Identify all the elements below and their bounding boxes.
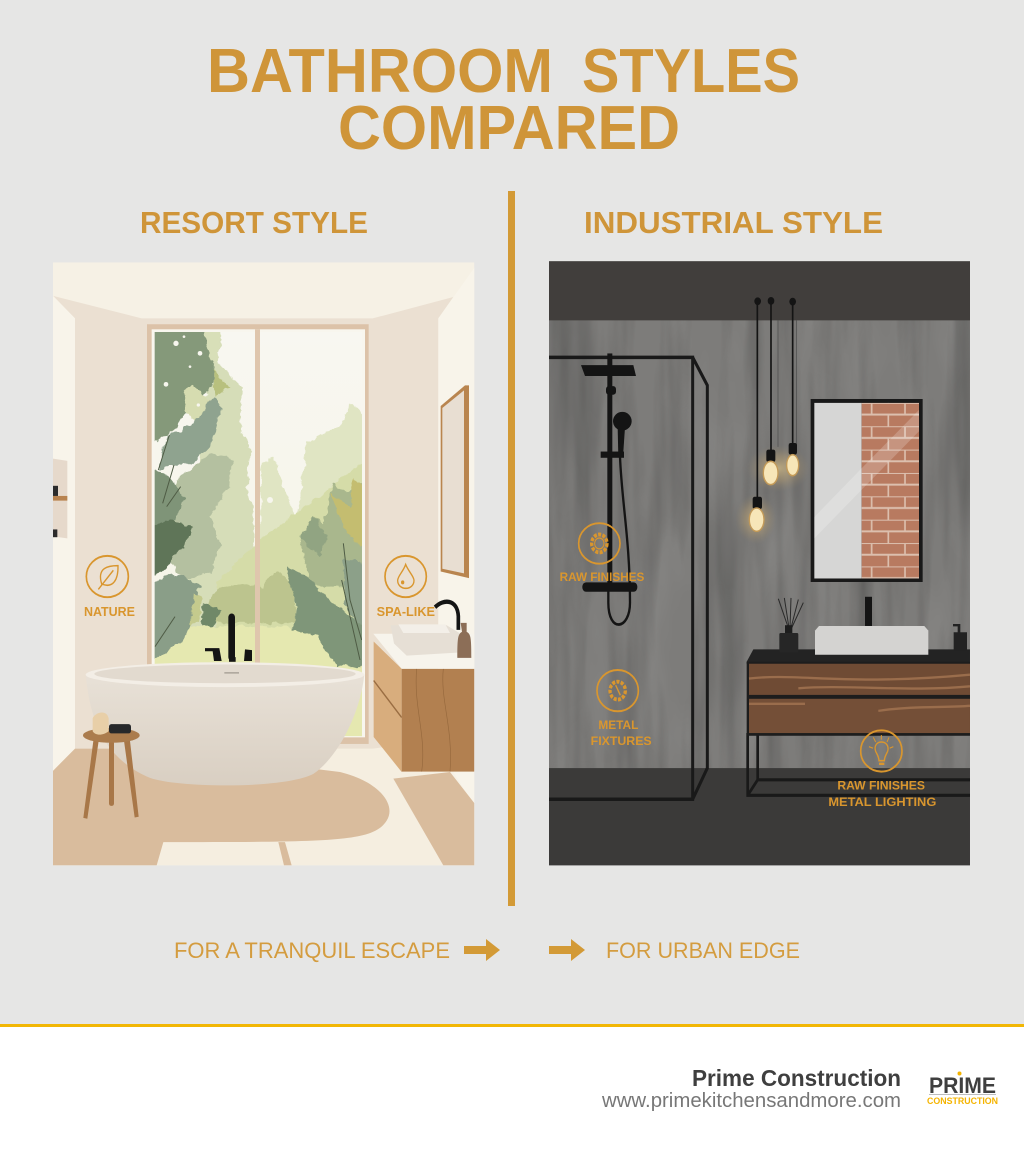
icon: water drop (385, 556, 426, 597)
soap bottle (457, 623, 471, 658)
logo: prime construction: CONSTRUCTION (927, 1096, 998, 1107)
label: metal fixtures: METAL (598, 719, 638, 732)
window (147, 324, 369, 744)
concrete ceiling (549, 261, 970, 320)
title: COMPARED (338, 94, 680, 163)
icon: metal fixture gear (597, 670, 638, 711)
caption: for urban edge: FOR URBAN EDGE (606, 938, 800, 963)
label: raw finishes metal lighting: METAL LIGHTING (828, 797, 937, 809)
reed diffuser (778, 598, 803, 652)
icon: light bulb (861, 730, 902, 772)
vanity cabinet (373, 634, 474, 772)
shower enclosure frame (549, 357, 707, 799)
footer: company name and website: www.primekitchensandmore.com (601, 1090, 901, 1112)
vessel sink and tap (815, 597, 928, 655)
vessel sink and faucet (391, 602, 459, 656)
vanity (747, 649, 970, 795)
icon: gear (579, 523, 620, 564)
wall mirror (441, 385, 469, 578)
label: raw finishes metal lighting: RAW FINISHES (837, 780, 926, 793)
heading: industrial style: INDUSTRIAL STYLE (584, 205, 883, 240)
arrow: right (549, 939, 585, 961)
concrete floor (549, 768, 970, 865)
mirror with brick reflection (811, 399, 923, 582)
footer: company name and website (601, 1065, 901, 1112)
label: spa-like: SPA-LIKE (377, 604, 435, 619)
window mullion (255, 329, 260, 664)
label: nature: NATURE (84, 604, 135, 619)
panel: industrial style illustration (549, 261, 970, 865)
garden foliage (150, 327, 367, 667)
title: BATHROOM (207, 37, 553, 106)
center divider (508, 191, 515, 906)
wall niche (53, 459, 67, 538)
title (207, 37, 800, 163)
panel: resort style illustration (53, 262, 474, 865)
faucet on tub (205, 614, 252, 662)
pendant lights (739, 297, 804, 539)
label: metal fixtures (591, 720, 652, 745)
label: metal fixtures: FIXTURES (591, 735, 652, 748)
icon: leaf (86, 556, 128, 597)
wooden stool (83, 712, 140, 819)
logo: prime construction: PRIME (929, 1073, 996, 1098)
logo: prime construction (927, 1072, 998, 1107)
title: STYLES (582, 37, 800, 106)
caption: for a tranquil escape: FOR A TRANQUIL ESCAPE (174, 938, 450, 963)
footer rule (0, 1024, 1024, 1027)
arrow: left (464, 939, 500, 961)
label: raw finishes: RAW FINISHES (560, 572, 645, 584)
shower fixtures (581, 353, 637, 625)
heading: resort style: RESORT STYLE (140, 205, 368, 240)
soap dispenser (953, 624, 967, 650)
label: raw finishes metal lighting (829, 781, 936, 806)
floor (53, 745, 474, 865)
footer: company name and website: Prime Construction (692, 1065, 901, 1091)
freestanding bathtub (86, 662, 364, 785)
footer band (0, 1027, 1024, 1154)
